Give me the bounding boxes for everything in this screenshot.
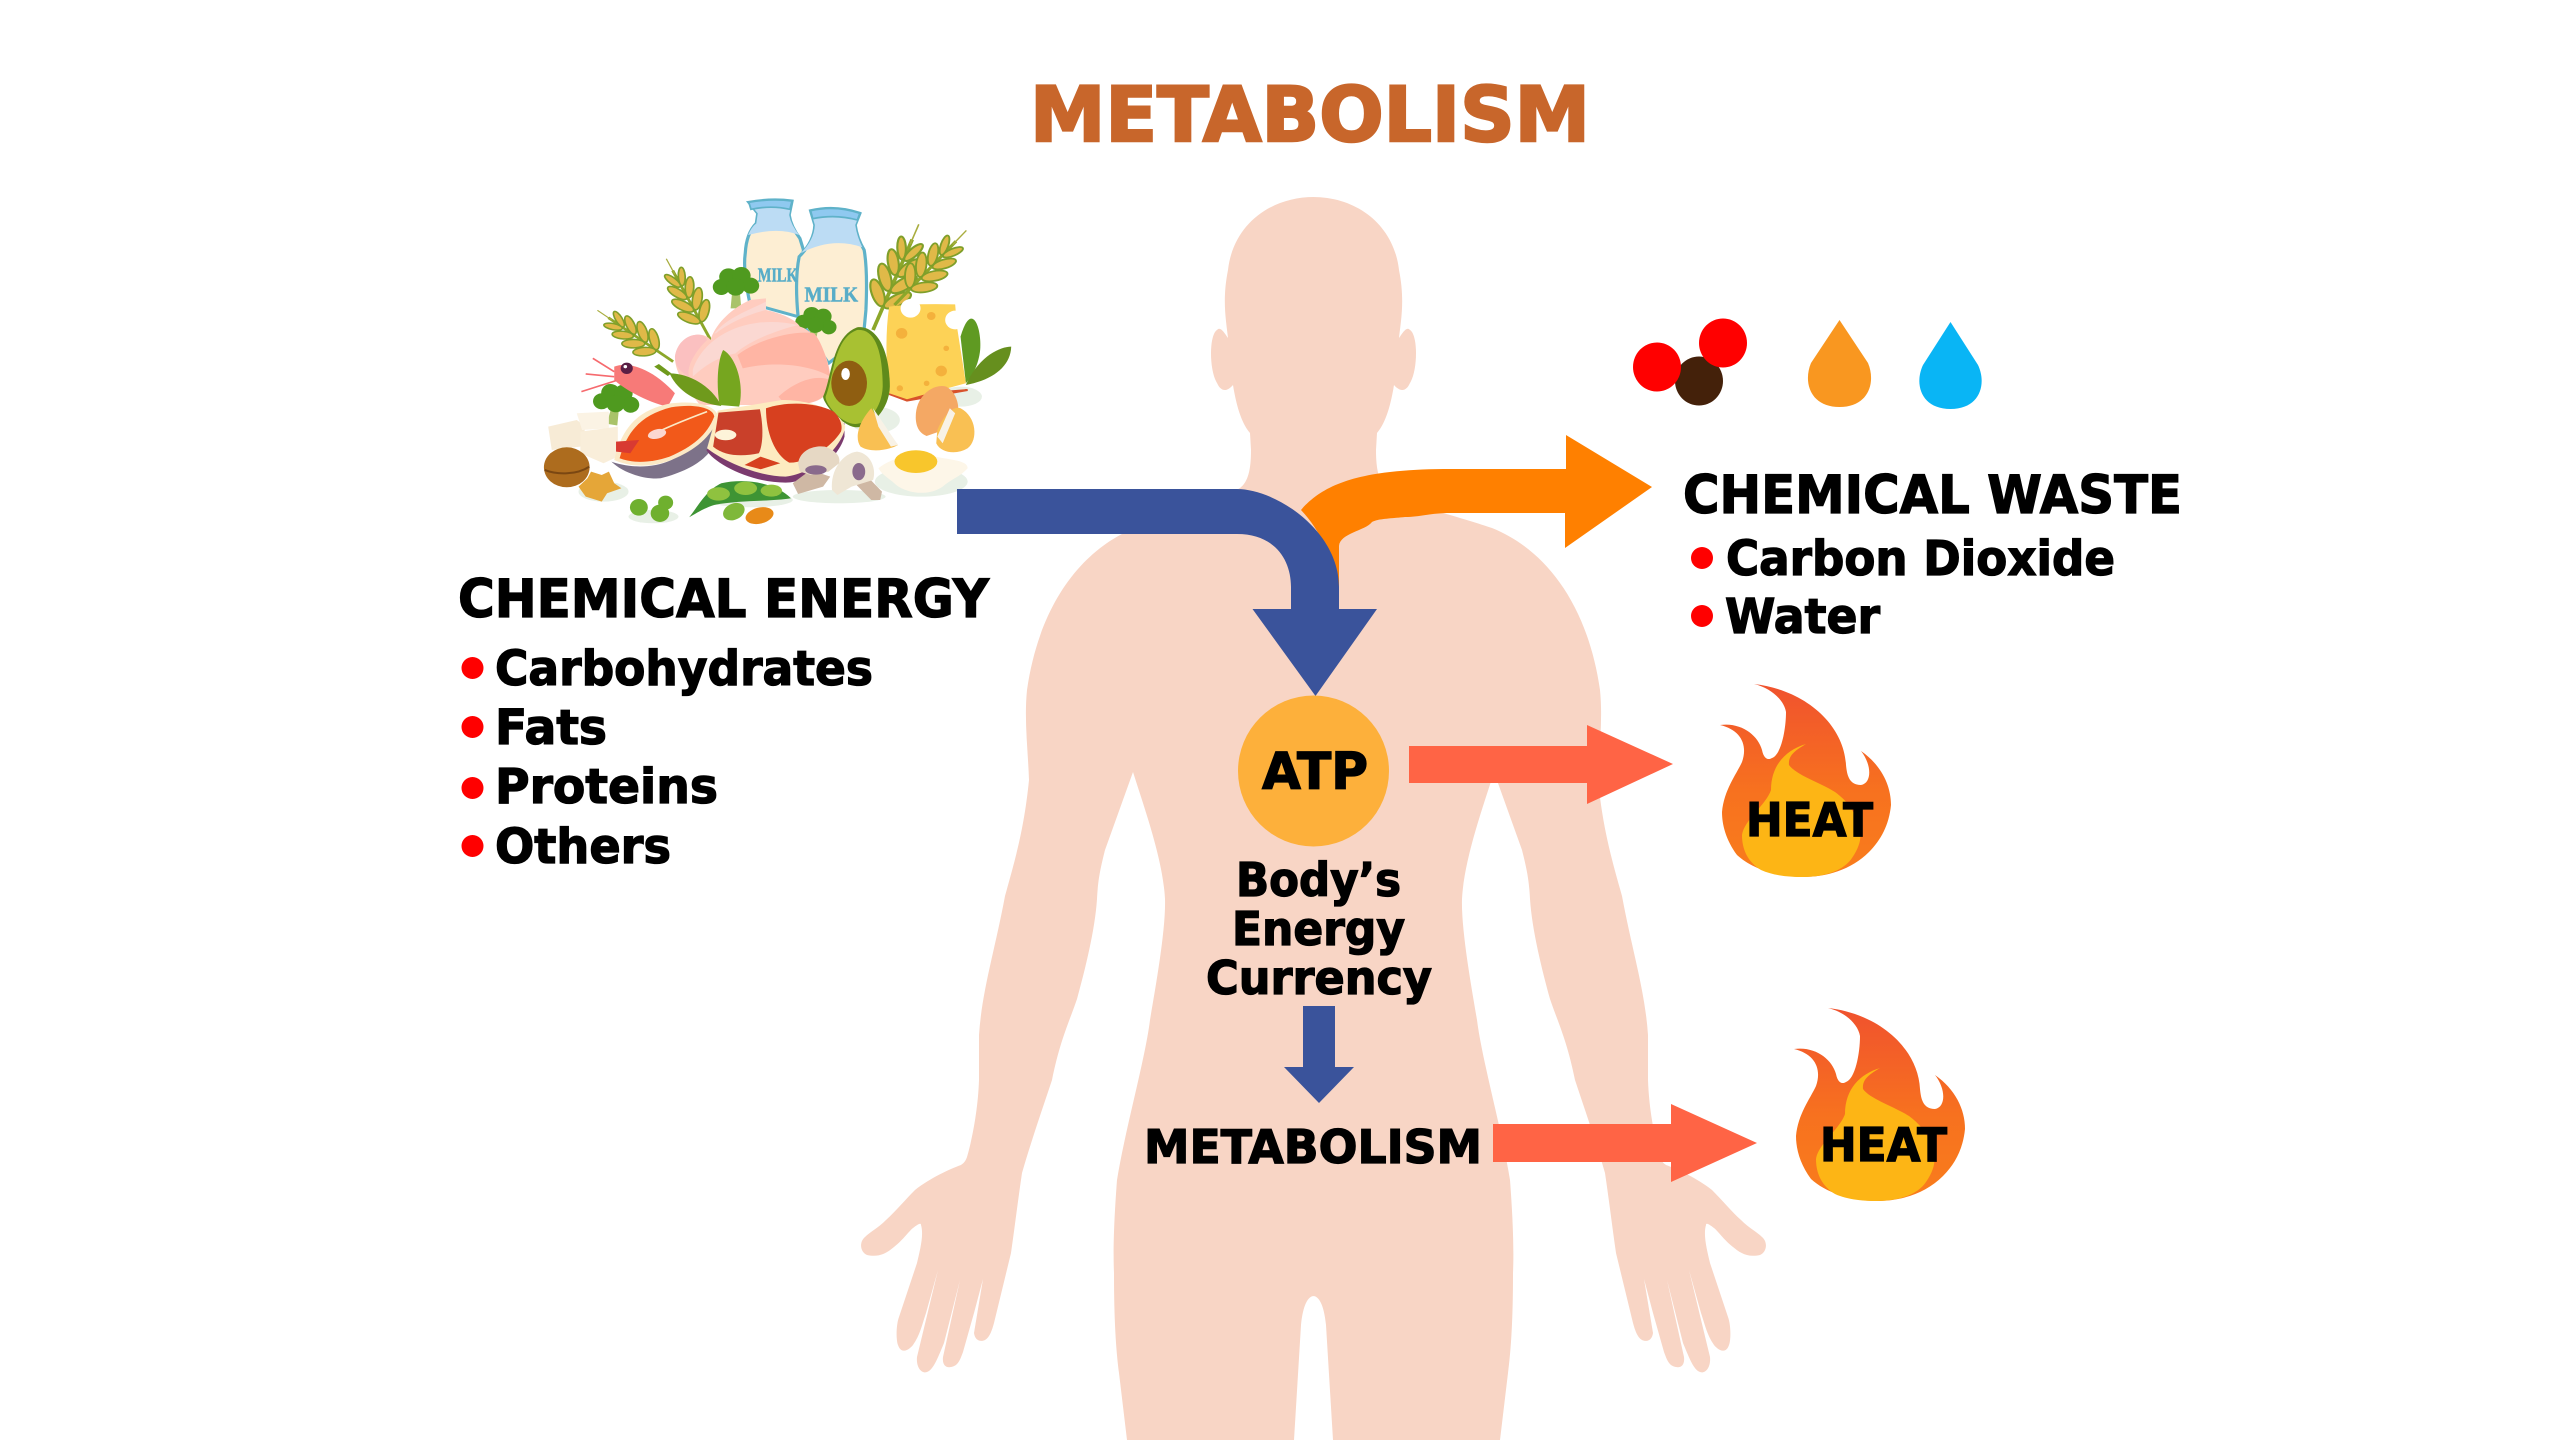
salmon steak [611,402,719,479]
body's energy currency text [1206,853,1432,1005]
blue intake arrow [957,489,1377,696]
wheat stalks [586,216,983,376]
ATP circle [1238,696,1389,846]
heat flame 1 [1720,684,1891,877]
red arrow: metabolism to heat [1493,1104,1757,1182]
tofu [548,412,618,463]
bullet: carbohydrates [462,657,484,679]
small blue arrow down [1284,1006,1354,1103]
fried egg [878,450,968,493]
label: others: Others [495,819,671,875]
label: fats: Fats [495,700,607,756]
eggs [858,386,974,452]
mushrooms [793,446,882,500]
broccoli [589,267,841,428]
food illustration [544,200,1011,527]
metabolism label: METABOLISM [1144,1120,1482,1174]
milk bottles: MILK [805,282,859,306]
milk bottles [745,200,867,363]
food shadows [579,387,982,523]
title: METABOLISM [1030,70,1590,159]
milk bottles: MILK [758,265,798,286]
orange waste arrow [1301,435,1652,600]
shrimp [581,358,675,407]
label: carbon dioxide: Carbon Dioxide [1726,531,2115,587]
bullet: fats [462,716,484,738]
icon: carbon dioxide molecule [1633,318,1747,406]
red arrow: ATP to heat [1409,725,1673,804]
avocado [823,327,890,427]
chicken [675,298,830,405]
chemical energy heading: CHEMICAL ENERGY [458,569,990,630]
beef steak [706,400,845,483]
bullet: carbon dioxide [1691,547,1713,569]
label: proteins: Proteins [495,759,718,815]
body's energy currency text: Currency [1206,951,1432,1005]
bullet: proteins [462,777,484,799]
label: carbohydrates: Carbohydrates [495,641,873,697]
walnuts [544,447,621,502]
chemical waste list [1691,531,2115,645]
peas and beans [630,481,791,527]
leaves [654,350,741,407]
human body silhouette [861,197,1766,1440]
cheese [886,299,1011,401]
icon: orange water drop [1808,320,1871,407]
heat flame 2 [1794,1008,1965,1201]
heat label 1: HEAT [1746,793,1874,847]
chemical waste heading: CHEMICAL WASTE [1683,465,2182,526]
icon: blue water drop [1919,322,1982,409]
label: water: Water [1725,589,1880,645]
heat label 2: HEAT [1820,1118,1948,1172]
bullet: others [462,835,484,857]
body's energy currency text: Energy [1232,902,1405,956]
ATP label: ATP [1262,743,1368,802]
chemical energy list [462,641,873,875]
body's energy currency text: Body’s [1236,853,1401,907]
bullet: water [1691,605,1713,627]
